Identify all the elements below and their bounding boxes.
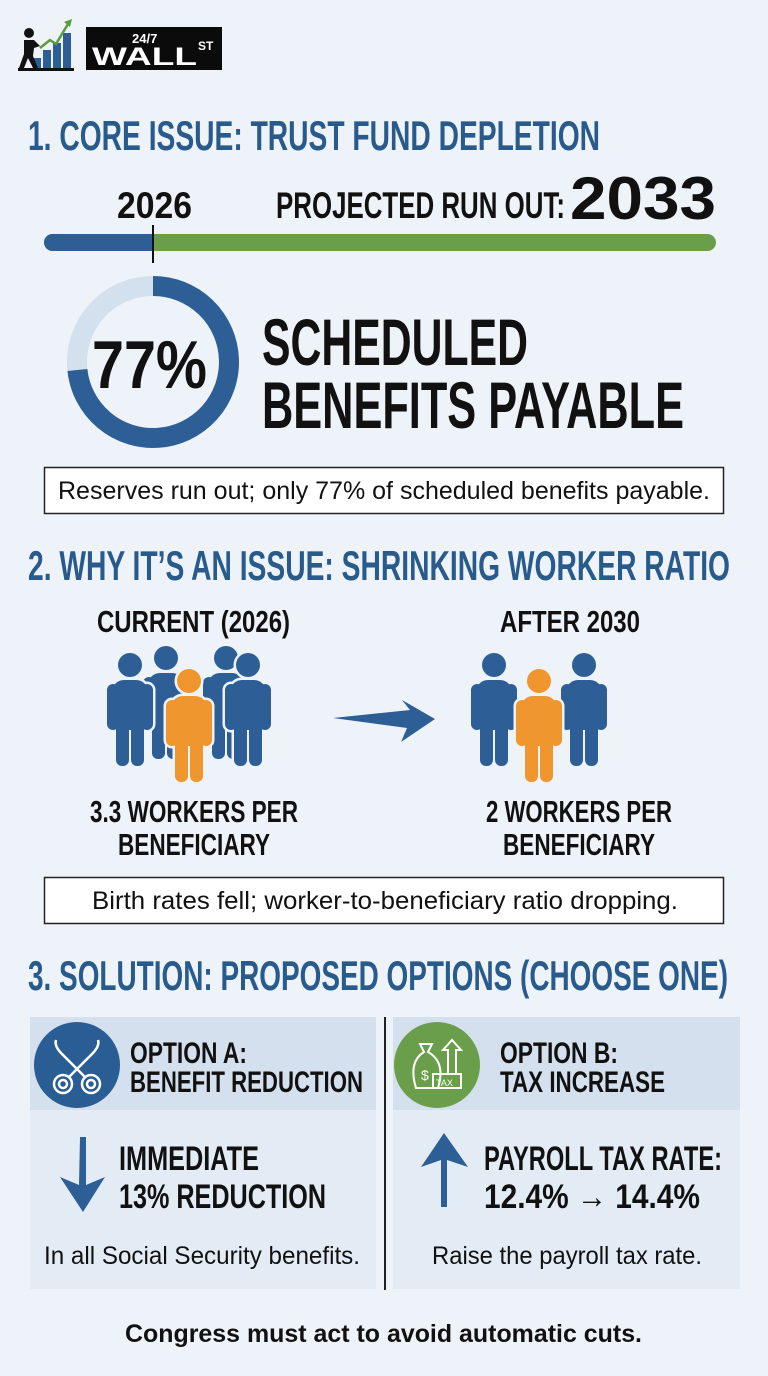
logo wordmark: ST	[198, 39, 214, 53]
after 2030 group: 2 WORKERS PER	[486, 794, 672, 829]
icon: money bag tax	[394, 1022, 480, 1108]
icon: down arrow	[60, 1137, 105, 1212]
icon: climber with chart	[18, 19, 74, 71]
panel: option A: OPTION A:	[130, 1037, 247, 1070]
headline: scheduled benefits	[262, 305, 684, 442]
icon: money bag tax: $	[421, 1067, 429, 1083]
panel: option B: 12.4% → 14.4%	[484, 1178, 700, 1216]
panel: option A: In all Social Security benefits.	[44, 1242, 360, 1270]
icon: five people	[107, 646, 271, 782]
donut 77%: 77%	[92, 327, 207, 403]
callout 2: Birth rates fell; worker-to-beneficiary ratio dropping.	[92, 887, 678, 915]
current group: 3.3 WORKERS PER	[90, 794, 298, 829]
timeline: 2026	[117, 185, 192, 226]
after 2030 group: BENEFICIARY	[503, 827, 655, 862]
panel: option A	[30, 1017, 376, 1289]
icon: money bag tax: TAX	[436, 1078, 453, 1088]
panel: option A: IMMEDIATE	[119, 1140, 259, 1178]
callout 1: Reserves run out; only 77% of scheduled benefits payable.	[58, 477, 710, 505]
current group: CURRENT (2026)	[97, 604, 290, 639]
panel: option B	[393, 1017, 740, 1289]
footer: Congress must act to avoid automatic cuts.	[125, 1320, 642, 1348]
logo wordmark: 24/7	[132, 31, 157, 46]
after 2030 group	[471, 604, 672, 862]
panel: option A: 13% REDUCTION	[119, 1178, 326, 1216]
current group: BENEFICIARY	[118, 827, 270, 862]
after 2030 group: AFTER 2030	[500, 604, 640, 639]
arrow right	[333, 700, 435, 742]
timeline: 2033	[570, 165, 716, 232]
logo wordmark	[86, 27, 222, 71]
callout 2	[44, 878, 724, 924]
panel: option B: Raise the payroll tax rate.	[432, 1242, 702, 1270]
donut 77%	[77, 286, 229, 438]
logo	[18, 19, 222, 71]
timeline: PROJECTED RUN OUT:	[276, 185, 565, 226]
icon: up arrow	[421, 1133, 468, 1207]
headline: scheduled benefits: SCHEDULED	[262, 305, 528, 379]
callout 1	[44, 468, 724, 514]
current group	[90, 604, 298, 862]
timeline	[44, 165, 716, 263]
panel: option A: BENEFIT REDUCTION	[130, 1066, 363, 1099]
icon: scissors	[34, 1022, 120, 1108]
logo wordmark: WALL	[92, 43, 197, 71]
icon: three people	[471, 653, 607, 782]
panel: option B: TAX INCREASE	[500, 1066, 665, 1099]
panel: option B: OPTION B:	[500, 1037, 618, 1070]
